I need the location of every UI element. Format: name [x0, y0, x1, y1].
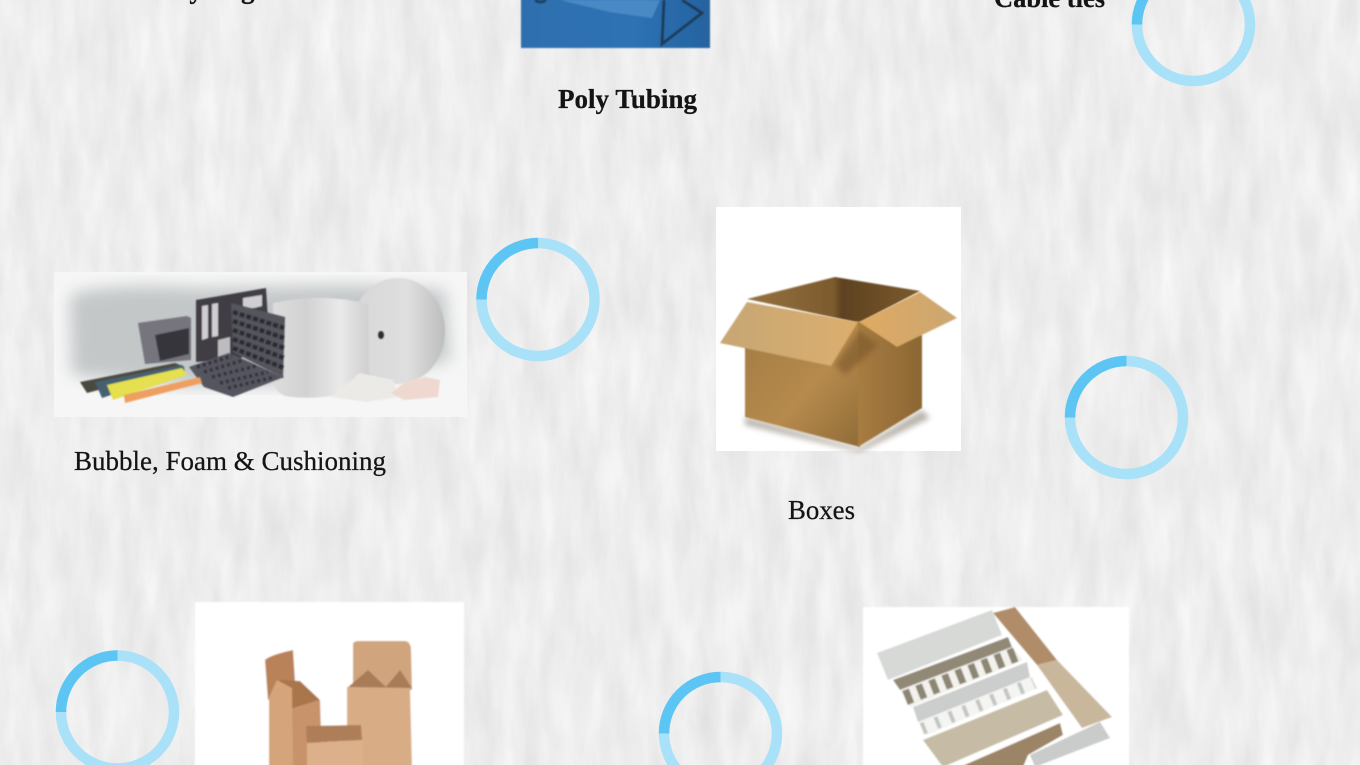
progress ring: folding cartons — [61, 656, 174, 765]
image detail: foam frame — [196, 288, 268, 362]
label: Poly Tubing: Poly Tubing — [558, 84, 697, 114]
image detail: foam rods — [80, 363, 202, 403]
label: Boxes: Boxes — [788, 495, 855, 525]
image detail: slotted white base — [918, 677, 1038, 735]
image detail: vertical egg crate foam — [231, 303, 285, 378]
image detail: second divider — [893, 637, 1012, 690]
image detail: bubble wrap disk — [351, 278, 445, 384]
image detail: white slots — [922, 683, 1034, 729]
image: bubble, foam and cushioning — [54, 272, 467, 417]
progress ring: partitions — [664, 677, 777, 765]
image detail: left carton — [265, 650, 322, 765]
image detail: slots — [905, 654, 1017, 698]
image detail: white packing peanuts — [331, 373, 398, 402]
image detail: ground shadow — [745, 410, 930, 452]
image detail: box interior — [747, 277, 920, 323]
image: cardboard box — [716, 207, 961, 452]
progress ring: boxes — [1070, 361, 1183, 474]
image: folding cartons — [195, 602, 464, 765]
image detail: disk core — [378, 331, 384, 339]
image: poly tubing — [521, 0, 710, 48]
image: partition trays — [863, 607, 1129, 765]
image detail: lower slotted section — [960, 723, 1063, 765]
image detail: pink packing peanuts — [391, 377, 440, 400]
image detail: tan divider — [923, 690, 1063, 765]
progress ring: bubble, foam and cushioning — [482, 243, 594, 356]
image detail: right flap — [859, 292, 957, 347]
image detail: box front faces — [745, 321, 922, 447]
image detail: right carton — [347, 641, 412, 765]
image detail: foam block — [138, 316, 191, 364]
image detail: third divider — [913, 662, 1030, 722]
label: Bubble, Foam and Cushioning: Bubble, Foam & Cushioning — [74, 446, 386, 476]
image detail: top white divider — [877, 610, 1002, 680]
image detail: upright bubble roll — [273, 298, 369, 398]
image detail: slotted base — [900, 647, 1023, 707]
image detail: egg crate foam floor — [189, 353, 284, 397]
image detail: grey backdrop — [70, 285, 450, 385]
image detail: small front carton — [306, 725, 363, 765]
image detail: brown edge rail — [993, 607, 1057, 665]
image detail: tan edge rail — [1037, 660, 1112, 728]
image detail: bottom right white rail — [1030, 722, 1110, 765]
image detail: flap shadow — [835, 330, 878, 375]
image detail: left flap — [720, 302, 858, 366]
progress ring: cable ties — [1137, 0, 1250, 81]
